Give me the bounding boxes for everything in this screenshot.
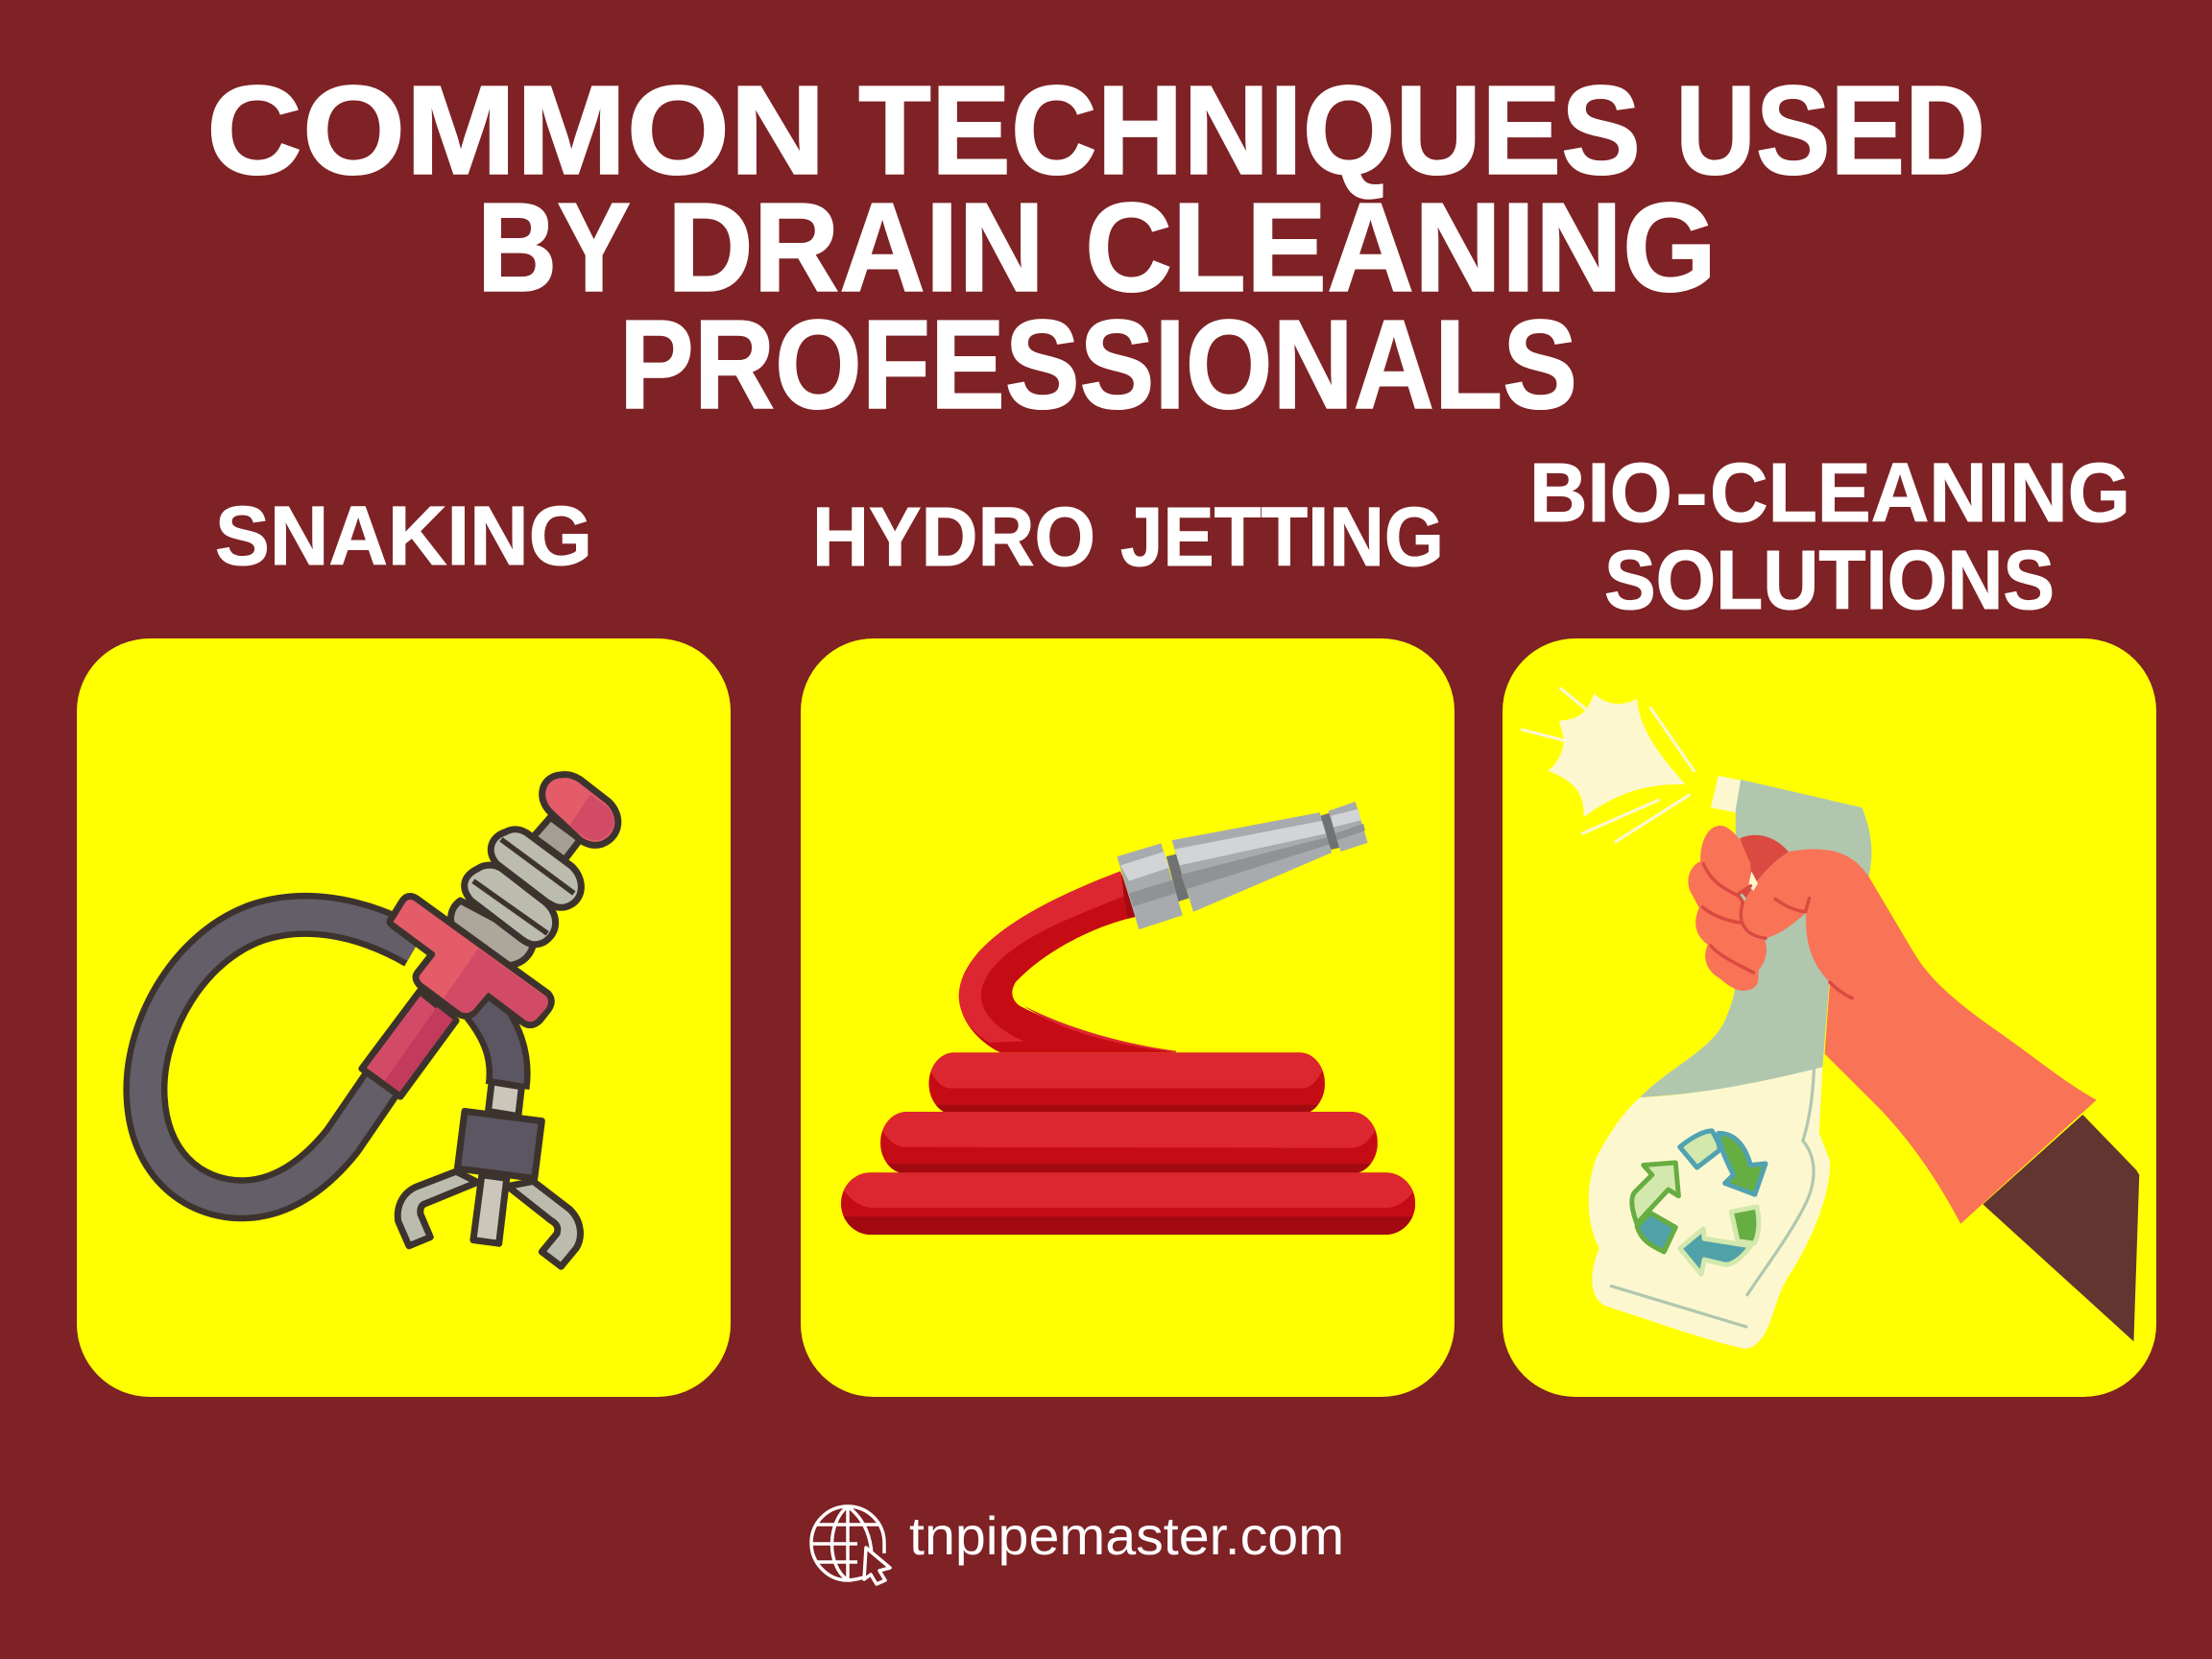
title: CLEANING bbox=[1085, 177, 1717, 318]
icon: drain snake bbox=[145, 775, 618, 1266]
title: COMMON bbox=[206, 60, 826, 201]
heading: bio-cleaning solutions: - bbox=[1675, 446, 1708, 540]
red trigger bbox=[1740, 835, 1789, 903]
heading: bio-cleaning solutions bbox=[1529, 446, 2130, 627]
spray bottle bbox=[1589, 776, 1871, 1349]
hose coil: bottom bbox=[841, 1172, 1415, 1235]
title: TECHNIQUES bbox=[858, 60, 1641, 201]
snake cable loop bbox=[145, 915, 509, 1199]
panel: snaking bbox=[77, 638, 731, 1397]
title: DRAIN bbox=[667, 177, 1045, 318]
title: BY bbox=[477, 177, 631, 318]
heading: hydro jetting bbox=[812, 491, 1444, 584]
icon: red hose with nozzle bbox=[841, 802, 1415, 1235]
icon: spray bottle in gloved hand bbox=[1522, 688, 2139, 1349]
panel: bio-cleaning solutions bbox=[1503, 638, 2156, 1397]
red T handle bbox=[362, 775, 618, 1096]
nozzle bbox=[1117, 802, 1368, 929]
heading: snaking: SNAKING bbox=[215, 490, 592, 583]
hose coil: middle bbox=[880, 1112, 1378, 1174]
claw head bbox=[397, 1082, 580, 1266]
panel: hydro jetting bbox=[801, 638, 1455, 1397]
footer: website bbox=[811, 1505, 1344, 1584]
recycle symbol bbox=[1632, 1131, 1766, 1274]
handle shading bbox=[385, 794, 613, 1092]
dark sleeve bbox=[1983, 1115, 2139, 1341]
icon: globe with cursor bbox=[811, 1506, 890, 1584]
heading: bio-cleaning solutions: BIO bbox=[1529, 446, 1672, 540]
website address: tnpipemaster.com bbox=[909, 1505, 1344, 1566]
glove arm and fist bbox=[1688, 826, 2097, 1224]
hose riser bbox=[959, 871, 1176, 1052]
heading: hydro jetting: HYDRO bbox=[812, 491, 1095, 584]
heading: bio-cleaning solutions: SOLUTIONS bbox=[1604, 534, 2055, 627]
spray burst bbox=[1522, 688, 1694, 842]
title: USED bbox=[1675, 60, 1985, 201]
handle stem and coils bbox=[451, 817, 581, 965]
heading: bio-cleaning solutions: CLEANING bbox=[1710, 446, 2130, 540]
heading: hydro jetting: JETTING bbox=[1120, 491, 1444, 584]
title: PROFESSIONALS bbox=[619, 294, 1577, 435]
hose coil: top bbox=[928, 1052, 1325, 1115]
title bbox=[206, 60, 1985, 435]
